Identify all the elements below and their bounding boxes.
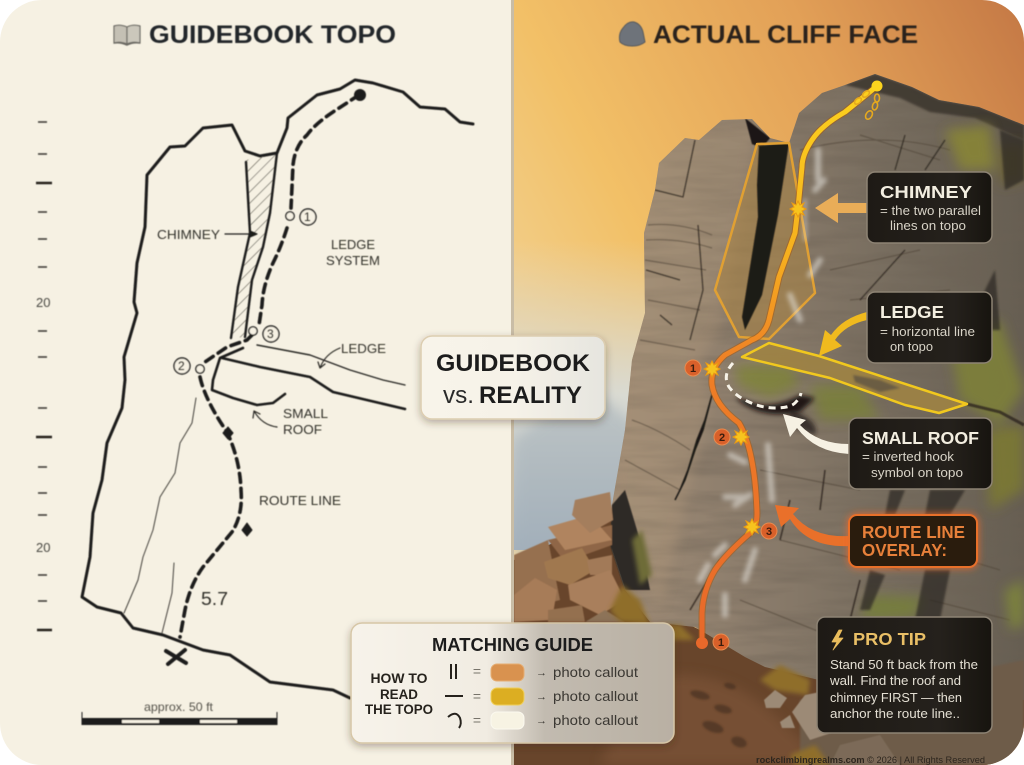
callout: chimney: CHIMNEY [880,182,972,202]
matching guide panel: → [536,715,547,727]
callout: chimney: = the two parallel [880,203,981,218]
panel: actual cliff face [514,0,1024,765]
topo labels: ROOF [283,422,322,437]
topo labels: SYSTEM [326,253,380,268]
callout: chimney [867,172,992,243]
ledge arrow [318,348,340,368]
callout: pro tip: wall. Find the roof and [829,673,961,688]
callout: ledge: on topo [890,339,933,354]
rock cracks [124,398,196,633]
matching guide panel: = [473,712,481,728]
chimney arrow [225,231,257,237]
rear right boulders [800,660,1024,765]
main tapered crack [675,395,712,500]
distant hills [514,398,626,555]
title badge: vs. [443,382,474,409]
arrow: small roof [783,414,849,454]
title badge: REALITY [479,382,582,409]
anchor dot [354,89,366,101]
callout: route line overlay: OVERLAY: [862,540,947,560]
start X [166,650,186,664]
panel: guidebook topo [0,0,514,765]
matching guide panel: = [473,663,481,679]
chalk marks [700,150,824,615]
how to read label: HOW TO [370,671,428,686]
icon: lightning bolt [832,630,843,650]
dark gaps right [860,130,1024,620]
callout: ledge: = horizontal line [880,324,975,339]
topo labels: 5.7 [201,589,228,609]
ground [514,520,1024,765]
how to read label: THE TOPO [365,702,433,717]
height scale ticks: 20 [36,540,50,555]
anchor point [872,80,882,92]
arrow: chimney [815,193,867,223]
topo labels: CHIMNEY [157,227,220,242]
heading: guidebook topo: GUIDEBOOK TOPO [149,21,396,49]
route dashed line [180,95,359,637]
height scale ticks: 20 [36,295,50,310]
ground stones [764,690,900,765]
legend symbols [445,664,463,728]
pinnacle notch shadow [745,118,770,148]
small roof arrow [253,411,277,427]
callout: pro tip: Stand 50 ft back from the [830,657,978,672]
route line overlay [702,86,880,643]
how to read label: READ [380,687,418,702]
topo labels: 3 [267,327,274,341]
chimney hatched area [231,153,277,338]
arrow: route line [775,505,849,546]
matching guide panel: → [536,691,547,703]
chimney overlay [715,143,815,339]
rock pile [514,490,650,622]
topo labels: 2 [178,359,185,373]
bolt diamonds [223,427,252,536]
topo labels: SMALL [283,406,328,421]
cliff rock [600,60,1024,720]
callout: pro tip: anchor the route line.. [830,706,960,721]
icon: open book [114,25,140,45]
topo labels [157,210,386,609]
topo labels: LEDGE [341,341,386,356]
callout: route line overlay [849,515,977,567]
center divider [511,0,514,765]
height scale ticks [36,122,52,630]
topo labels: LEDGE [331,237,375,252]
topo labels: 1 [304,210,311,224]
matching guide panel: MATCHING GUIDE [432,635,593,655]
stars and pitch numbers: 2 [719,432,725,444]
topo labels: ROUTE LINE [259,493,341,508]
title badge [421,336,605,419]
matching guide panel: photo callout [553,712,638,728]
stars and pitch numbers: 1 [718,637,724,649]
arrow: ledge [819,312,867,356]
callout: pro tip: PRO TIP [853,629,926,649]
callout: route line overlay: ROUTE LINE [862,522,965,542]
callout: small roof: symbol on topo [871,465,963,480]
matching guide panel: → [536,667,547,679]
matching guide panel [351,623,674,743]
footprints [689,682,748,749]
stars and pitch numbers [685,201,806,650]
callout: pro tip: chimney FIRST — then [830,690,962,705]
chimney dark crack [742,143,789,330]
title badge: GUIDEBOOK [436,350,590,377]
anchor chains [853,90,880,120]
matching guide panel: = [473,688,481,704]
scale bar [82,700,277,725]
callout: small roof [849,418,992,489]
callout: chimney: lines on topo [890,218,966,233]
callout: small roof: SMALL ROOF [862,428,979,448]
top dark cap [845,74,1024,140]
moss patches [735,125,1024,630]
scale bar: approx. 50 ft [144,700,214,714]
cliff outline [82,80,473,698]
callout: ledge: LEDGE [880,302,944,322]
heading: guidebook topo [112,24,396,46]
callout: ledge [867,292,992,363]
matching guide panel: photo callout [553,688,638,704]
ledge overlay [742,343,967,413]
topo diagram [82,80,473,698]
how to read label [365,671,433,717]
matching guide panel: photo callout [553,664,638,680]
callout: small roof: = inverted hook [862,449,955,464]
icon: rock [619,22,645,46]
ledge lines [257,345,405,385]
stars and pitch numbers: 3 [766,526,772,538]
small roof dashed outline [726,363,816,435]
callout: pro tip [817,617,992,733]
belay stations [174,209,316,374]
legend swatches [491,664,524,681]
dry grass tufts [610,530,830,765]
cracks [646,135,1024,640]
stars and pitch numbers: 1 [690,363,696,375]
sandy left tower shading [616,122,754,590]
strata lines [625,135,1010,640]
heading: actual cliff face: ACTUAL CLIFF FACE [653,21,918,49]
small roof hook [212,348,285,405]
